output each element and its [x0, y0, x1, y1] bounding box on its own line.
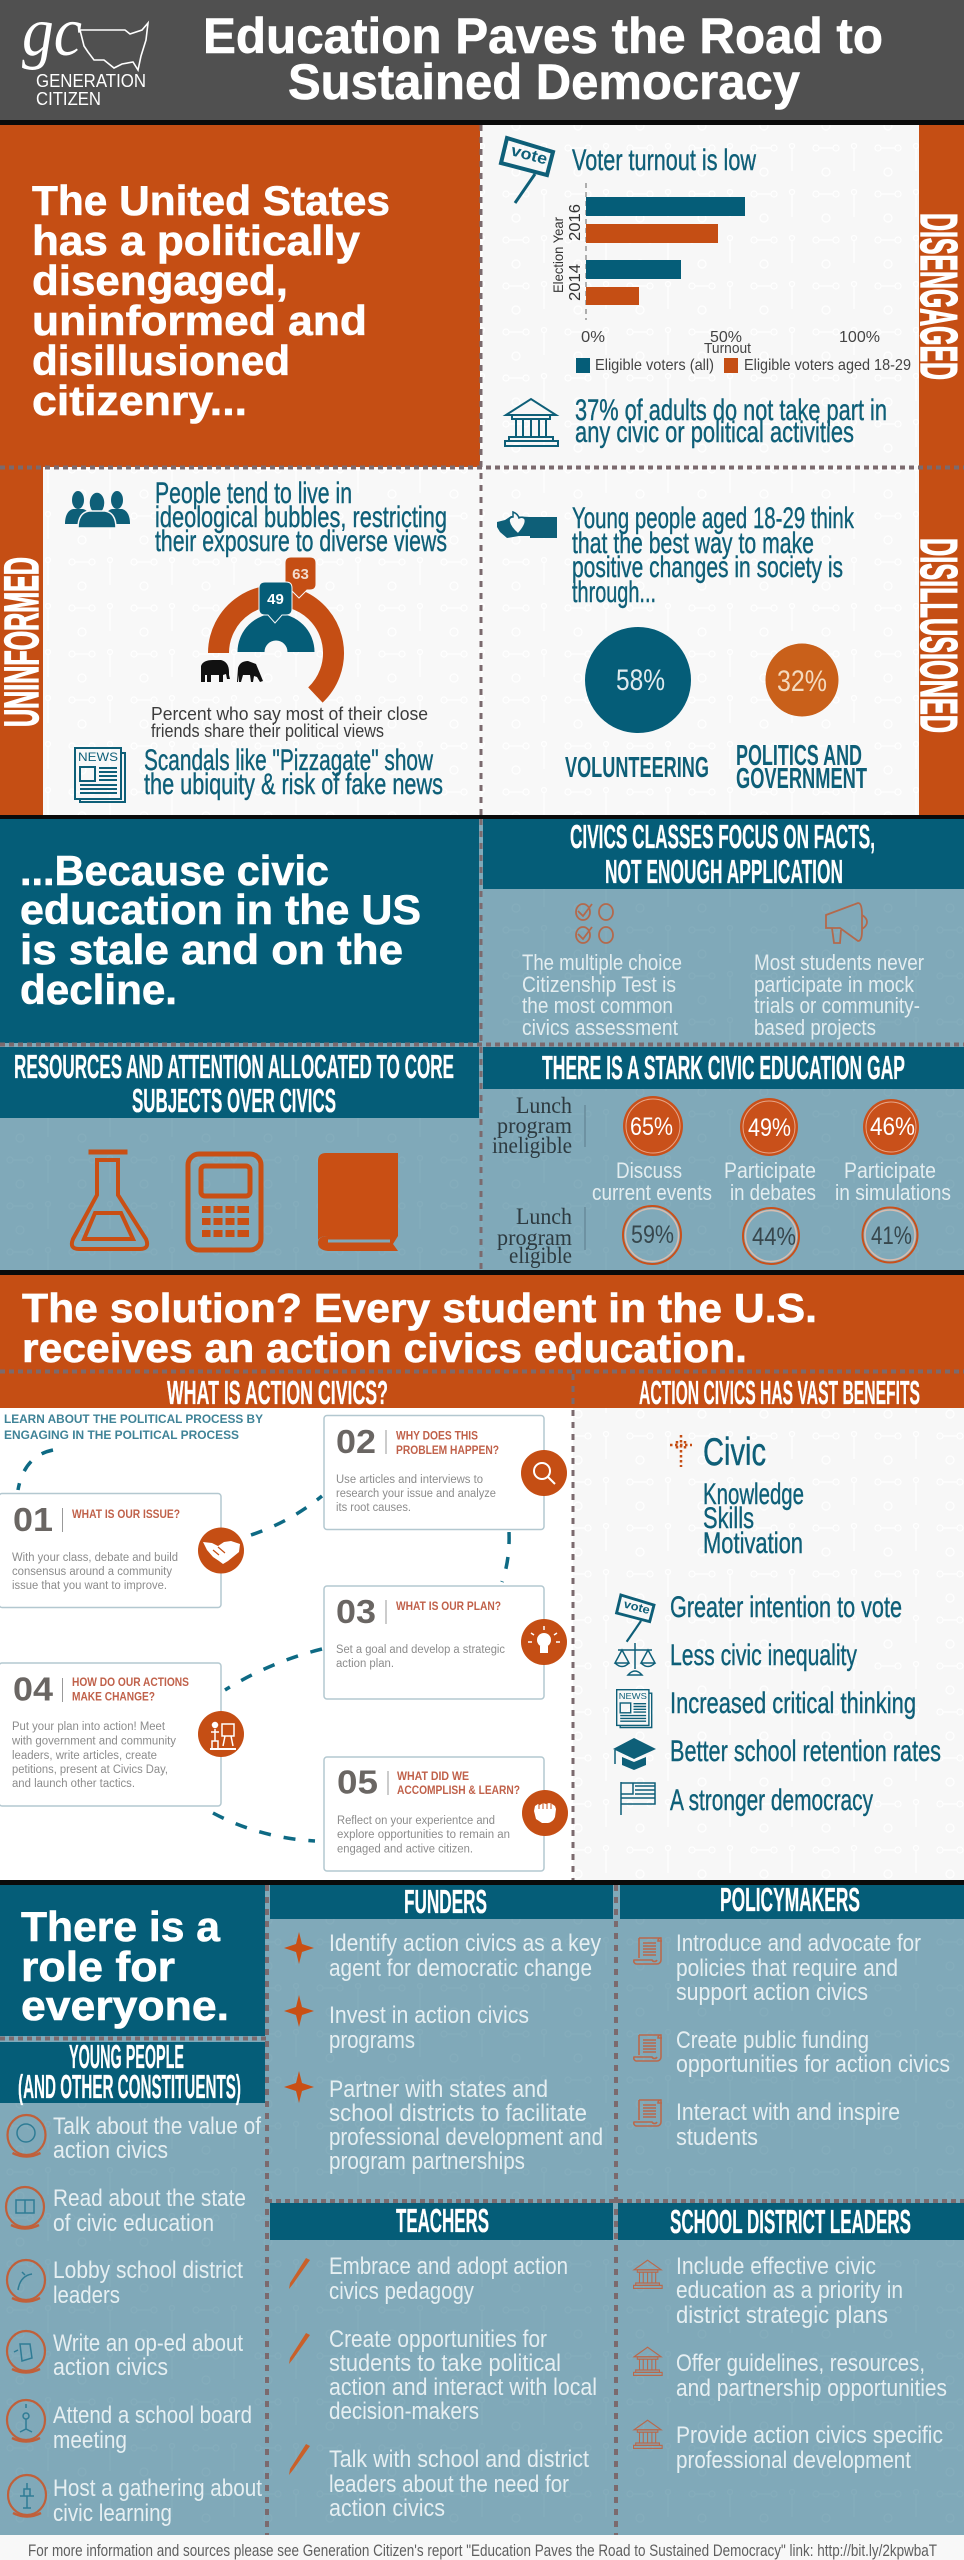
text: mock trials: participate in mock: [754, 972, 915, 997]
step 04: MAKE CHANGE?: [72, 1692, 155, 1704]
bar chart: turnout: 100%: [839, 329, 880, 346]
benefit: greater intention to vote: [617, 1591, 902, 1642]
panel: disengaged background: [480, 125, 919, 467]
benefit: a stronger democracy: A stronger democracy: [670, 1784, 873, 1817]
step 02: [324, 1416, 567, 1530]
panel: because civic education background: [0, 815, 964, 1275]
step 03: WHAT IS OUR PLAN?: [396, 1601, 501, 1613]
list: young people actions: of civic education: [53, 2210, 214, 2237]
heading: voter turnout: Voter turnout is low: [572, 144, 756, 177]
legend: Eligible voters aged 18-29: [744, 357, 911, 374]
chart: close friends radial: 63: [292, 566, 309, 583]
list: teachers actions: decision-makers: [329, 2398, 479, 2425]
labels: lunch program eligible: program: [497, 1225, 572, 1250]
chart: ineligible circles: 46%: [870, 1113, 915, 1141]
panel: United States headline: The United States: [32, 177, 390, 224]
text: ideological bubbles: People tend to live in: [155, 477, 352, 510]
header band: [0, 0, 964, 125]
benefit: less civic inequality: [615, 1639, 857, 1675]
step 01: consensus around a community: [12, 1566, 172, 1578]
list: school district leaders actions: [634, 2253, 947, 2474]
chart: politics 32 percent: 32%: [777, 665, 827, 698]
list: teachers actions: action civics: [329, 2495, 445, 2522]
labels: activities: [592, 1158, 951, 1205]
step 02: 02: [336, 1423, 376, 1460]
icon: elephant and donkey: [201, 660, 263, 682]
text: young people think: through...: [572, 576, 656, 609]
list: school district leaders actions: district strategic plans: [676, 2302, 888, 2329]
step 05: 05: [337, 1764, 378, 1800]
step 02: Use articles and interviews to: [336, 1474, 483, 1486]
list: young people actions: leaders: [53, 2282, 120, 2309]
step 04: with government and community: [11, 1736, 176, 1748]
list: funders actions: agent for democratic change: [329, 1955, 592, 1982]
chart: ineligible circles: 49%: [748, 1114, 791, 1142]
step 05: Reflect on your experientce and: [337, 1815, 495, 1827]
list: policymakers actions: policies that require and: [676, 1955, 898, 1982]
text: young people think: that the best way to make: [572, 527, 814, 560]
list: teachers actions: civics pedagogy: [329, 2278, 474, 2305]
icon: calculator: [188, 1154, 261, 1250]
text: mock trials: trials or community-: [754, 993, 920, 1018]
step 01: issue that you want to improve.: [12, 1580, 167, 1592]
heading: because civic education: [20, 847, 421, 1013]
chart: politics 32 percent: GOVERNMENT: [736, 763, 867, 795]
text: ideological bubbles: their exposure to diverse views: [155, 525, 447, 558]
banner: the solution: [0, 1275, 964, 1409]
step 01: With your class, debate and build: [12, 1552, 178, 1564]
heading: resources: [14, 1048, 454, 1119]
labels: lunch program eligible: [497, 1204, 585, 1268]
text: mock trials: based projects: [754, 1015, 876, 1040]
list: funders actions: school districts to facilitate: [329, 2100, 587, 2127]
legend: Eligible voters (all): [595, 357, 714, 374]
step 05: explore opportunities to remain an: [337, 1829, 510, 1841]
list: young people actions: civic learning: [53, 2500, 172, 2527]
chart: politics 32 percent: [736, 644, 867, 795]
panel: United States headline: disillusioned: [32, 337, 290, 384]
step 04: Put your plan into action! Meet: [12, 1721, 166, 1733]
chart: eligible rings: 44%: [752, 1223, 796, 1251]
legend: [576, 357, 911, 374]
arrows: dashed path: [18, 1450, 509, 1841]
text: (AND OTHER CONSTITUENTS): [18, 2068, 241, 2105]
list: young people actions: action civics: [53, 2354, 168, 2381]
list: funders actions: professional development and: [329, 2124, 603, 2151]
step 01: [0, 1494, 244, 1608]
icon: civic building: [505, 399, 558, 446]
bar chart: turnout: 2016: [567, 204, 584, 241]
icon: vote sign: [501, 138, 553, 203]
benefit: less civic inequality: Less civic inequality: [670, 1639, 857, 1672]
bar chart: turnout: [550, 183, 880, 357]
text: Pizzagate: the ubiquity & risk of fake news: [144, 768, 443, 801]
labels: lunch program ineligible: Lunch: [516, 1093, 572, 1118]
bar chart: turnout: Election Year: [550, 217, 566, 293]
step 03: action plan.: [336, 1658, 394, 1670]
list: policymakers actions: Interact with and inspire: [676, 2099, 900, 2126]
step 04: and launch other tactics.: [12, 1778, 135, 1790]
chart: close friends radial: [218, 557, 333, 695]
step 04: petitions, present at Civics Day,: [12, 1764, 168, 1776]
step 02: PROBLEM HAPPEN?: [396, 1445, 499, 1457]
labels: activities: Participate: [844, 1158, 936, 1183]
icon: people: [65, 491, 130, 528]
step 04: HOW DO OUR ACTIONS: [72, 1677, 189, 1689]
chart: ineligible circles: 65%: [630, 1113, 673, 1141]
panel: uninformed: [0, 467, 919, 815]
icon: newspaper: [75, 748, 125, 802]
list: teachers actions: Talk with school and district: [329, 2446, 589, 2473]
step 03: 03: [336, 1593, 376, 1630]
logo: Generation Citizen: CITIZEN: [36, 89, 101, 109]
caption: close friends: [151, 704, 428, 741]
labels: activities: Discuss: [616, 1158, 682, 1183]
list: school district leaders actions: Include effective civic: [676, 2253, 876, 2280]
text: civic knowledge skills motivation: [703, 1431, 804, 1560]
chart: eligible rings: 59%: [631, 1221, 674, 1249]
step 01: 01: [13, 1501, 53, 1538]
list: young people actions: action civics: [53, 2137, 168, 2164]
chart: eligible rings: [623, 1206, 918, 1264]
title: Sustained Democracy: [288, 54, 800, 110]
heading: because civic education: ...Because civic: [20, 847, 329, 894]
heading: teachers: TEACHERS: [396, 2202, 489, 2239]
panel: United States headline: has a politically: [32, 217, 361, 264]
text: Pizzagate: [144, 744, 443, 801]
title: Education Paves the Road to: [203, 8, 883, 64]
text: mock trials: [754, 950, 924, 1040]
list: young people actions: Attend a school board: [53, 2402, 252, 2429]
list: young people actions: Host a gathering about: [53, 2475, 262, 2502]
text: citizenship test: [522, 950, 682, 1040]
labels: lunch program ineligible: ineligible: [492, 1133, 572, 1158]
text: civic knowledge skills motivation: Knowledge: [703, 1478, 804, 1511]
heading: what is action civics: WHAT IS ACTION CIVICS?: [167, 1374, 388, 1411]
step 05: WHAT DID WE: [397, 1771, 469, 1783]
chart: volunteering 58 percent: VOLUNTEERING: [565, 752, 709, 784]
list: school district leaders actions: education as a priority in: [676, 2277, 903, 2304]
bar chart: turnout: 50%: [710, 329, 742, 346]
list: young people actions: meeting: [53, 2427, 127, 2454]
heading: resources: RESOURCES AND ATTENTION ALLOCATED TO CORE: [14, 1048, 454, 1085]
list: young people actions: Lobby school district: [53, 2257, 243, 2284]
list: policymakers actions: [634, 1930, 950, 2151]
subheading: learn about the political process: LEARN ABOUT THE POLITICAL PROCESS BY: [4, 1412, 263, 1426]
text: Pizzagate: Scandals like "Pizzagate" show: [144, 744, 433, 777]
list: funders actions: program partnerships: [329, 2148, 525, 2175]
list: school district leaders actions: professional development: [676, 2447, 911, 2474]
icon: dotted cross: [670, 1435, 692, 1467]
benefit: increased critical thinking: [617, 1687, 916, 1728]
labels: activities: Participate: [724, 1158, 816, 1183]
panel: United States headline: disengaged,: [32, 257, 288, 304]
text: 37 percent: any civic or political activities: [575, 416, 854, 449]
banner: the solution: The solution? Every student in the U.S.: [22, 1285, 817, 1331]
text: civic knowledge skills motivation: Motivation: [703, 1527, 803, 1560]
labels: activities: current events: [592, 1180, 712, 1205]
list: teachers actions: students to take political: [329, 2350, 561, 2377]
list: policymakers actions: Create public funding: [676, 2027, 869, 2054]
panel: United States headline: uninformed and: [32, 297, 367, 344]
text: civic knowledge skills motivation: Civic: [703, 1431, 766, 1474]
list: policymakers actions: support action civics: [676, 1979, 868, 2006]
panel: United States headline: [0, 125, 480, 467]
heading: there is a role: everyone.: [21, 1982, 229, 2029]
subheading: learn about the political process: ENGAGING IN THE POLITICAL PROCESS: [4, 1428, 239, 1442]
heading: because civic education: is stale and on the: [20, 926, 403, 973]
text: ideological bubbles: ideological bubbles, restricting: [155, 501, 447, 534]
text: civic knowledge skills motivation: Skills: [703, 1502, 754, 1535]
step 03: Set a goal and develop a strategic: [336, 1644, 505, 1656]
list: funders actions: Invest in action civics: [329, 2002, 529, 2029]
heading: there is a role: There is a: [21, 1903, 221, 1950]
labels: lunch program eligible: eligible: [509, 1243, 572, 1268]
step 05: [324, 1757, 568, 1871]
logo: Generation Citizen: [22, 0, 148, 109]
list: teachers actions: Embrace and adopt action: [329, 2253, 568, 2280]
chart: eligible rings: 41%: [871, 1222, 912, 1250]
title: [203, 8, 883, 110]
icon: flask: [72, 1150, 147, 1249]
labels: activities: in debates: [730, 1180, 816, 1205]
text: young people think: [572, 502, 855, 609]
bar chart: turnout: 2014: [567, 264, 584, 301]
text: mock trials: Most students never: [754, 950, 924, 975]
list: policymakers actions: Introduce and advocate for: [676, 1930, 921, 1957]
text: citizenship test: The multiple choice: [522, 950, 682, 975]
chart: close friends radial: 49: [267, 591, 284, 608]
labels: lunch program eligible: Lunch: [516, 1204, 572, 1229]
text: young people think: positive changes in society is: [572, 551, 843, 584]
step 04: [0, 1663, 244, 1806]
icon: hand with heart: [497, 512, 557, 538]
caption: close friends: friends share their political views: [151, 721, 384, 741]
text: citizenship test: the most common: [522, 993, 673, 1018]
step 04: 04: [13, 1670, 54, 1708]
labels: lunch program ineligible: program: [497, 1113, 572, 1138]
list: teachers actions: leaders about the need for: [329, 2471, 569, 2498]
heading: civics classes: [570, 818, 875, 890]
heading: because civic education: education in the US: [20, 886, 421, 933]
list: young people actions: Read about the state: [53, 2185, 246, 2212]
chart: politics 32 percent: POLITICS AND: [736, 740, 862, 772]
icon: megaphone: [826, 903, 867, 943]
text: citizenship test: Citizenship Test is: [522, 972, 676, 997]
step 05: ACCOMPLISH & LEARN?: [397, 1785, 520, 1797]
heading: young people: [18, 2038, 241, 2105]
list: policymakers actions: students: [676, 2124, 758, 2151]
heading: there is a role: role for: [21, 1943, 175, 1990]
banner: the solution: receives an action civics education.: [22, 1325, 747, 1371]
panel: role for everyone background: [0, 1880, 964, 2535]
bar chart: turnout: 0%: [581, 329, 605, 346]
text: ideological bubbles: [155, 477, 447, 558]
heading: because civic education: decline.: [20, 966, 177, 1013]
text: citizenship test: civics assessment: [522, 1015, 678, 1040]
logo: Generation Citizen: GENERATION: [36, 71, 146, 91]
step 02: WHY DOES THIS: [396, 1430, 478, 1442]
step 02: research your issue and analyze: [336, 1488, 496, 1500]
list: young people actions: [6, 2113, 262, 2527]
list: funders actions: programs: [329, 2027, 415, 2054]
step 05: engaged and active citizen.: [337, 1844, 473, 1856]
list: young people actions: Write an op-ed about: [53, 2330, 243, 2357]
heading: funders: FUNDERS: [404, 1883, 487, 1920]
heading: there is a role: [21, 1903, 229, 2029]
list: school district leaders actions: Offer guidelines, resources,: [676, 2350, 925, 2377]
panel: action civics background: [0, 1408, 964, 1880]
step 03: [324, 1586, 567, 1699]
subheading: learn about the political process: [4, 1412, 263, 1442]
heading: resources: SUBJECTS OVER CIVICS: [132, 1082, 336, 1119]
strip: DISENGAGED: [909, 125, 964, 815]
icon: multiple choice checks: [576, 904, 613, 943]
list: funders actions: Identify action civics as a key: [329, 1930, 601, 1957]
chart: ineligible circles: [623, 1096, 919, 1156]
benefit: a stronger democracy: [621, 1782, 873, 1817]
panel: United States headline: citizenry...: [32, 377, 247, 424]
bar chart: turnout: Turnout: [704, 340, 752, 357]
chart: volunteering 58 percent: [565, 627, 709, 784]
list: funders actions: [284, 1930, 603, 2175]
icon: book: [318, 1153, 398, 1251]
heading: young people: YOUNG PEOPLE: [69, 2038, 184, 2075]
step 04: leaders, write articles, create: [12, 1750, 157, 1762]
chart: volunteering 58 percent: 58%: [616, 664, 665, 697]
list: young people actions: Talk about the value of: [53, 2113, 261, 2140]
step 01: WHAT IS OUR ISSUE?: [72, 1509, 180, 1521]
caption: close friends: Percent who say most of their close: [151, 704, 428, 724]
list: funders actions: Partner with states and: [329, 2076, 548, 2103]
list: teachers actions: action and interact with local: [329, 2374, 597, 2401]
list: teachers actions: Create opportunities for: [329, 2326, 547, 2353]
list: teachers actions: [289, 2253, 597, 2522]
text: 37 percent: [575, 394, 887, 449]
labels: lunch program ineligible: [492, 1093, 585, 1158]
step 02: its root causes.: [336, 1502, 411, 1514]
